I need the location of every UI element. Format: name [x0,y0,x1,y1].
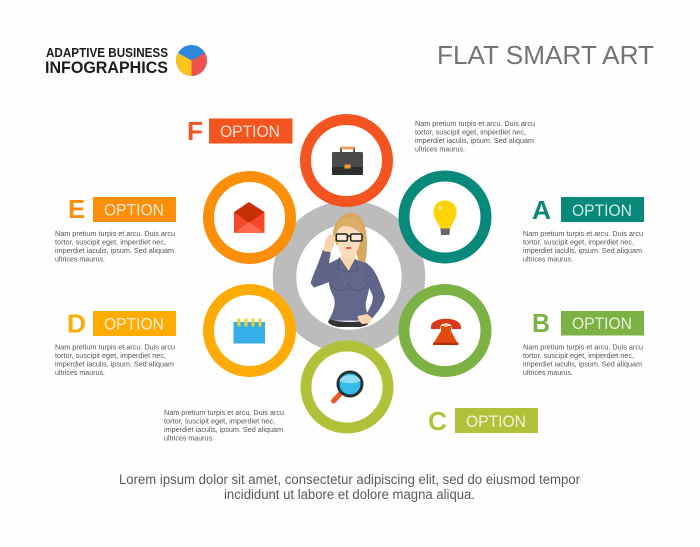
text block A: tortor, suscipit eget, imperdiet nec, [523,238,634,246]
label C: C [428,406,447,436]
text block B: Nam pretium turpis et arcu. Duis arcu [523,342,643,352]
label B: OPTION [572,315,632,333]
icon: light bulb [434,200,456,235]
fringe [334,218,363,238]
icon: envelope [234,202,264,233]
text block C [164,408,284,442]
text block D: Nam pretium turpis et arcu. Duis arcu [55,342,175,352]
text block E [55,229,175,264]
text block F: Nam pretium turpis et arcu. Duis arcu [415,119,535,128]
label D: OPTION [104,316,164,334]
label E: E [68,194,85,224]
label A [532,195,644,225]
text block B [523,342,643,377]
label F: OPTION [220,123,280,141]
text block A [523,229,643,264]
text block D: ultrices maurus. [55,368,105,377]
label F: F [187,116,203,146]
logo: adaptive business infographics [45,45,207,77]
text block D [55,342,175,377]
ring E [208,176,290,258]
label B: B [532,308,550,338]
ring A [404,176,486,258]
text block E: tortor, suscipit eget, imperdiet nec, [55,238,166,246]
center ring [284,212,414,342]
text block A: Nam pretium turpis et arcu. Duis arcu [523,229,643,238]
text block B: tortor, suscipit eget, imperdiet nec, [523,351,634,360]
text block B: ultrices maurus. [523,368,573,377]
logo pie icon [176,45,207,76]
footer text: incididunt ut labore et dolore magna aliqua. [224,487,475,502]
text block F [415,119,535,154]
blouse torso [328,258,370,321]
text block E: ultrices maurus. [55,254,105,264]
text block F: tortor, suscipit eget, imperdiet nec, [415,128,526,136]
face [337,222,361,258]
text block C: tortor, suscipit eget, imperdiet nec, [164,416,275,426]
icon: briefcase [332,146,363,175]
neck [341,250,355,273]
label D: D [67,308,86,338]
raised arm [311,250,341,288]
label F [187,116,292,146]
ring D [208,290,290,372]
text block A: imperdiet iaculis, ipsum. Sed aliquam [523,246,642,255]
logo text [45,45,168,77]
text block D: tortor, suscipit eget, imperdiet nec, [55,351,166,360]
ring F [306,120,388,202]
hip hand [357,314,372,324]
raised hand [324,235,335,252]
footer text: Lorem ipsum dolor sit amet, consectetur adipiscing elit, sed do eiusmod tempor [119,472,580,487]
label A: OPTION [572,202,632,220]
text block C: imperdiet iaculis, ipsum. Sed aliquam [164,425,283,434]
text block C: ultrices maurus. [164,434,214,442]
hair [333,213,367,271]
label C [428,406,538,436]
lips [346,247,352,249]
text block C: Nam pretium turpis et arcu. Duis arcu [164,408,284,417]
text block F: ultrices maurus. [415,144,465,154]
icon: calendar [234,318,265,344]
logo text: ADAPTIVE BUSINESS [46,45,168,60]
text block E: imperdiet iaculis, ipsum. Sed aliquam [55,246,174,255]
skirt [328,319,370,327]
ring C [306,346,388,428]
ring B [404,290,486,372]
label E [68,194,176,224]
icon: magnifier [334,372,362,401]
glasses [336,234,362,241]
text block F: imperdiet iaculis, ipsum. Sed aliquam [415,136,534,145]
label B [532,308,644,338]
label E: OPTION [104,202,164,220]
text block D: imperdiet iaculis, ipsum. Sed aliquam [55,360,174,368]
text block A: ultrices maurus. [523,254,573,264]
label D [67,308,176,338]
woman illustration [311,213,385,327]
label A: A [532,195,551,225]
blouse folds and buttons [330,258,369,319]
logo text: INFOGRAPHICS [45,59,168,77]
title: FLAT SMART ART [437,40,654,70]
right arm [365,263,385,319]
text block E: Nam pretium turpis et arcu. Duis arcu [55,229,175,238]
label C: OPTION [466,413,526,431]
icon: telephone [431,319,461,345]
text block B: imperdiet iaculis, ipsum. Sed aliquam [523,360,642,368]
footer text [119,472,580,502]
